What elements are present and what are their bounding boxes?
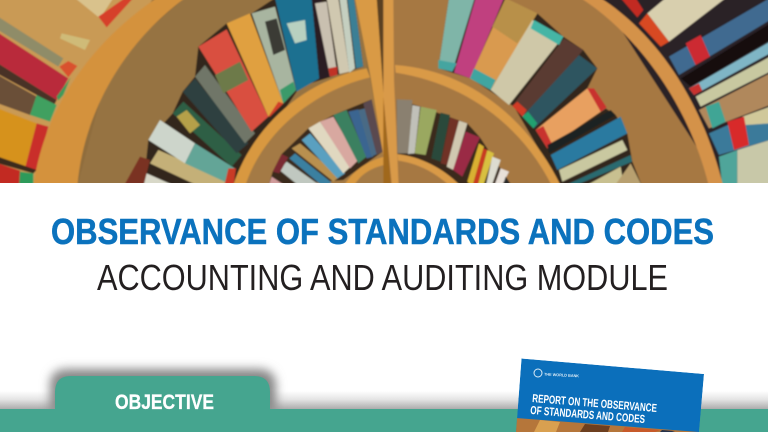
report cover — [516, 358, 704, 432]
right inner shelf board — [397, 153, 459, 183]
right outer shelf board — [581, 0, 723, 187]
right middle shelf board — [395, 65, 561, 187]
books: inner left tier — [268, 99, 383, 187]
tab label: OBJECTIVE — [115, 391, 214, 414]
right half of bookshelf — [383, 0, 768, 187]
World Bank logo: THE WORLD BANK — [544, 372, 579, 378]
photo: circular bookshelf — [0, 0, 768, 187]
books: inner right tier — [397, 99, 512, 187]
cover title: OF STANDARDS AND CODES — [530, 404, 646, 426]
cover title: REPORT ON THE OBSERVANCE — [532, 392, 658, 415]
green band with objective tab — [0, 369, 768, 432]
centre post right — [383, 0, 399, 187]
left half of bookshelf — [0, 0, 384, 187]
left outer shelf board — [33, 0, 185, 187]
centre post left — [355, 0, 384, 160]
heading: subtitle: ACCOUNTING AND AUDITING MODULE — [97, 257, 668, 298]
cover photo strip — [516, 418, 699, 432]
cover blue panel — [516, 358, 704, 432]
books: outer right tier — [601, 0, 768, 187]
cover title — [530, 394, 657, 423]
books: outer left tier — [0, 0, 153, 187]
left middle shelf board — [233, 68, 370, 187]
left inner shelf board — [345, 156, 384, 183]
books: middle left tier — [123, 0, 363, 187]
World Bank logo — [534, 369, 579, 378]
books: middle right tier — [438, 0, 642, 187]
